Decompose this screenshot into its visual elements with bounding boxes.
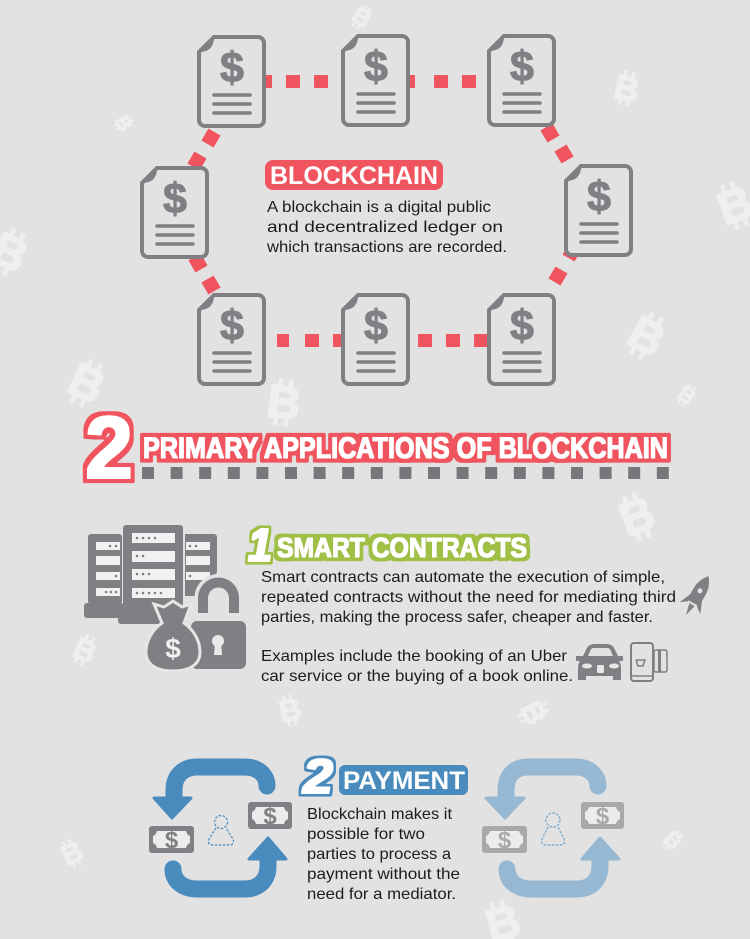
text: payment description: need for a mediator. (307, 886, 456, 903)
ledger document 5 (566, 166, 631, 255)
icon: exchange arrows, banknotes and person (faded): $ (498, 827, 512, 854)
heading: 2 primary applications of blockchain (85, 398, 668, 497)
text: blockchain definition: which transactions are recorded. (266, 239, 507, 256)
text: blockchain definition: and decentralized ledger on (267, 219, 503, 236)
background bitcoin watermarks: B (514, 697, 553, 730)
icon: exchange arrows, banknotes and person (faded): $ (596, 803, 610, 830)
ledger document 7: $ (364, 302, 388, 350)
background bitcoin watermarks: B (68, 631, 101, 670)
heading: 1 smart contracts: 1 (248, 519, 272, 571)
text: payment description (307, 806, 460, 903)
ledger document 1 (199, 37, 264, 126)
text: blockchain definition: A blockchain is a digital public (267, 199, 491, 216)
text: payment description: possible for two (307, 826, 425, 843)
icon: exchange arrows, banknotes and person (blue): $ (263, 803, 277, 830)
background bitcoin watermarks: B (264, 374, 304, 430)
ledger document 3 (489, 36, 554, 125)
ledger document 5: $ (587, 173, 611, 221)
heading: 2 payment: PAYMENT (343, 767, 465, 795)
text: smart contracts description: parties, making the process safer, cheaper and faster. (261, 609, 653, 626)
ledger document 6 (199, 295, 264, 384)
icon: car (576, 644, 623, 680)
text: smart contracts description: repeated contracts without the need for mediating third (261, 589, 676, 606)
icon: rocket (676, 570, 719, 621)
text: payment description: parties to process a (307, 846, 451, 863)
text: smart contracts description: Examples include the booking of an Uber (261, 648, 568, 665)
background bitcoin watermarks: B (658, 826, 688, 854)
ledger document 8: $ (510, 302, 534, 350)
text: smart contracts description: Smart contracts can automate the execution of simple, (261, 569, 665, 586)
icon: exchange arrows, banknotes and person (blue): $ (165, 827, 179, 854)
icon: exchange arrows, banknotes and person (faded) (482, 767, 624, 889)
heading: 2 primary applications of blockchain: 2 (85, 398, 133, 497)
background bitcoin watermarks: B (276, 693, 304, 729)
red dashed chain links (187, 75, 582, 347)
ledger document 1: $ (220, 44, 244, 92)
icon: exchange arrows, banknotes and person (blue) (149, 767, 292, 889)
ledger document 8 (489, 295, 554, 384)
ledger document 6: $ (220, 302, 244, 350)
heading: 1 smart contracts (248, 519, 527, 571)
heading: 2 payment (302, 751, 468, 804)
text: payment description: Blockchain makes it (307, 806, 453, 823)
text: smart contracts description (261, 569, 676, 685)
ledger document 4: $ (163, 175, 187, 223)
icon: servers, money bag and padlock (84, 525, 246, 671)
background bitcoin watermarks: B (110, 112, 136, 135)
ledger document 4 (142, 168, 207, 257)
background bitcoin watermarks: B (613, 486, 662, 546)
icon: servers, money bag and padlock: $ (165, 633, 181, 664)
background bitcoin watermarks: B (620, 305, 674, 367)
background bitcoin watermarks: B (61, 353, 113, 414)
grey square dashes under heading (142, 467, 669, 479)
icon: phone and credit card (631, 643, 667, 681)
heading: 2 primary applications of blockchain: PRIMARY APPLICATIONS OF BLOCKCHAIN (143, 432, 668, 465)
background bitcoin watermarks: B (56, 835, 88, 872)
background bitcoin watermarks: B (347, 2, 376, 34)
ledger document 3: $ (510, 43, 534, 91)
ledger document 2 (343, 36, 408, 125)
ledger document 7 (343, 295, 408, 384)
background bitcoin watermarks: B (673, 380, 701, 410)
heading: 1 smart contracts: SMART CONTRACTS (277, 532, 527, 563)
heading: 2 payment: 2 (302, 751, 333, 804)
text: smart contracts description: car service or the buying of a book online. (261, 668, 573, 685)
text: blockchain definition (266, 199, 507, 256)
ledger document 2: $ (364, 43, 388, 91)
background bitcoin watermarks: B (611, 68, 643, 110)
text: payment description: payment without the (307, 866, 460, 883)
heading: blockchain: BLOCKCHAIN (270, 162, 438, 190)
